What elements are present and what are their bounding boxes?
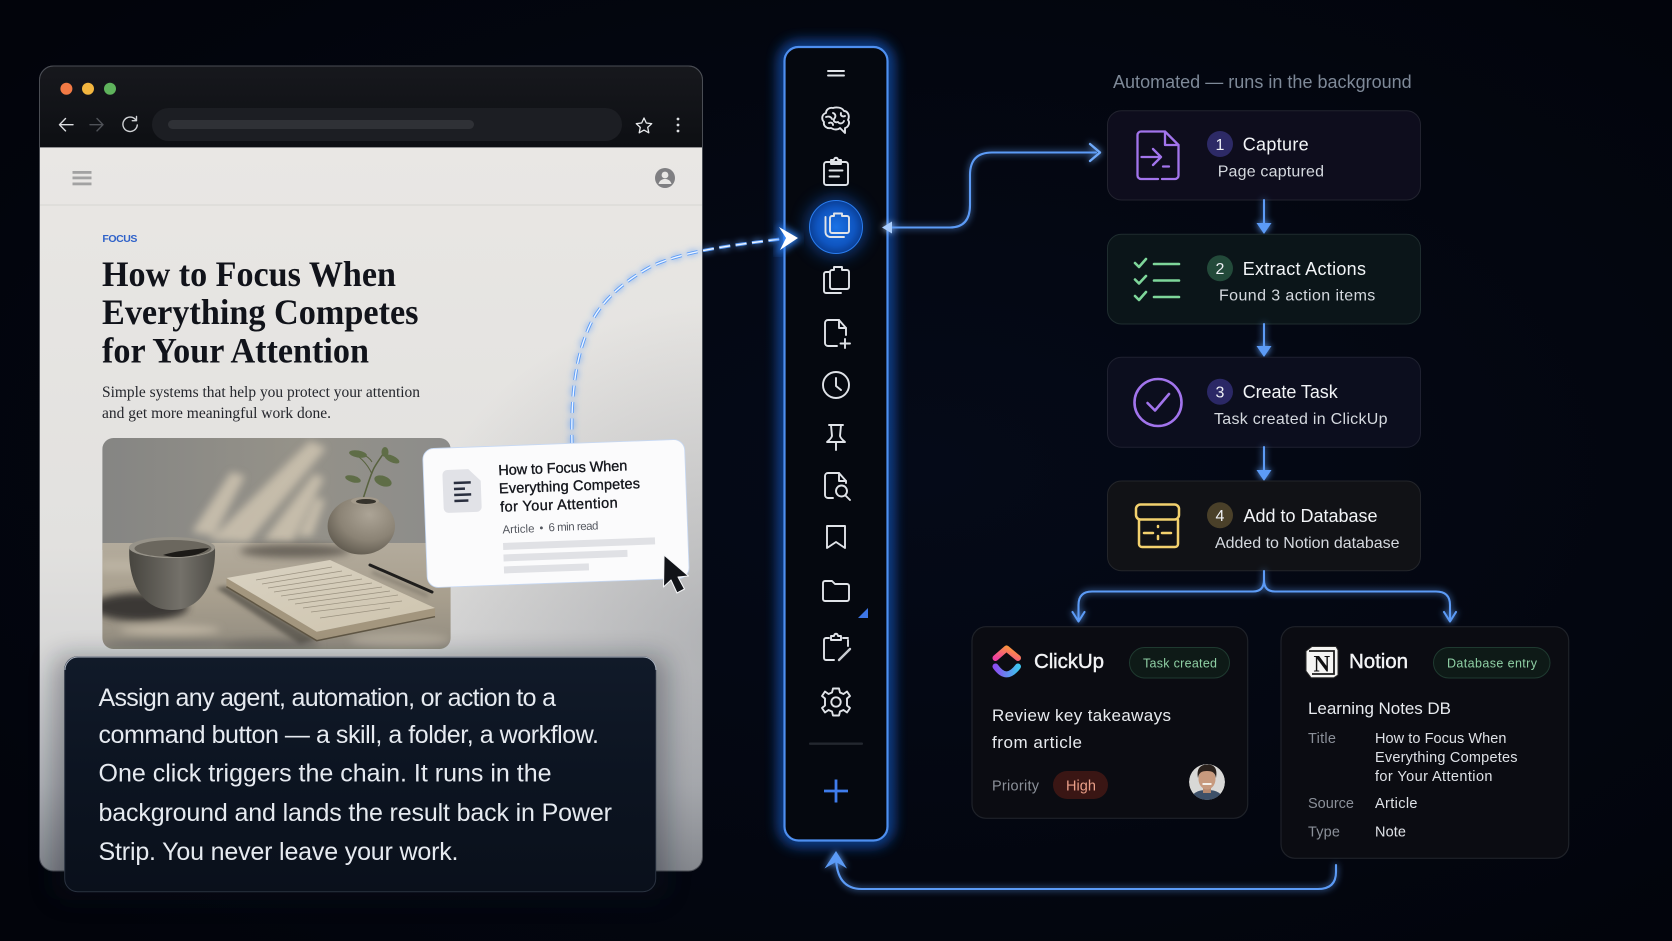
icon: file search xyxy=(825,473,850,500)
badge 1 xyxy=(1207,131,1233,157)
card: dragged article preview xyxy=(422,439,689,588)
icon: pin xyxy=(827,425,845,450)
badge: database entry xyxy=(1434,648,1550,678)
article category: FOCUS xyxy=(102,233,137,245)
arrowhead: dashed connector into active button xyxy=(779,227,798,250)
database fields: Everything Competes xyxy=(1375,750,1518,766)
browser title bar xyxy=(40,66,702,148)
text panel: description: command button — a skill, a folder, a workflow. xyxy=(98,721,599,749)
article headline: How to Focus When xyxy=(102,254,396,294)
icon: folder xyxy=(823,581,849,601)
icon: corner expand marker xyxy=(858,608,868,618)
icon: mouse cursor xyxy=(664,555,688,593)
active command button xyxy=(806,197,866,257)
task title: Review key takeaways xyxy=(992,706,1171,725)
arrow: step 2 to 3 xyxy=(1256,324,1272,357)
article subtitle xyxy=(102,384,420,422)
clickup name: ClickUp xyxy=(1034,650,1104,673)
cup xyxy=(129,537,215,610)
icon: new file xyxy=(825,320,850,348)
logo: clickup xyxy=(996,648,1018,674)
step title: Create Task xyxy=(1243,382,1339,402)
step 1: capture xyxy=(1108,111,1420,200)
icon: add button xyxy=(824,780,848,802)
preview text lines xyxy=(503,537,656,573)
preview title: for Your Attention xyxy=(500,495,618,516)
step status: Task created in ClickUp xyxy=(1214,411,1388,428)
article headline: Everything Competes xyxy=(102,292,418,332)
step 4: add to database xyxy=(1108,481,1420,571)
notebook xyxy=(226,560,435,641)
logo: notion xyxy=(1306,646,1338,678)
icon: copy xyxy=(824,267,849,293)
article photo: cup, notebook and plant xyxy=(92,438,451,651)
step title: Capture xyxy=(1243,134,1309,154)
icon: check circle xyxy=(1134,379,1182,426)
article subtitle: Simple systems that help you protect your attention xyxy=(102,384,420,401)
icon: clipboard edit xyxy=(824,634,850,660)
star and menu icons xyxy=(636,118,679,133)
task title: from article xyxy=(992,733,1082,752)
navigation icons xyxy=(60,116,137,131)
connector: dashed arc from article card to active button xyxy=(572,238,790,446)
plant in vase xyxy=(328,447,401,554)
icon: clipboard xyxy=(824,158,848,185)
icon: brain xyxy=(822,107,849,133)
text panel: description: One click triggers the chain. It runs in the xyxy=(98,760,552,788)
badge 4 xyxy=(1207,502,1233,528)
preview title: Everything Competes xyxy=(499,476,640,497)
database fields: for Your Attention xyxy=(1375,769,1492,785)
badge: high priority: High xyxy=(1066,778,1096,794)
text panel: description: background and lands the result back in Power xyxy=(98,799,612,827)
icon: capture document xyxy=(1138,132,1178,179)
article headline xyxy=(102,254,418,370)
preview title xyxy=(498,458,641,516)
preview meta: Article xyxy=(502,523,535,536)
preview title: How to Focus When xyxy=(498,458,628,479)
article headline: for Your Attention xyxy=(102,330,369,370)
arrow: fork to output cards xyxy=(1072,571,1456,622)
database fields: Note xyxy=(1375,824,1406,840)
badge 3 xyxy=(1207,379,1233,405)
database fields: Title xyxy=(1308,731,1336,747)
arrow: step 1 to 2 xyxy=(1256,200,1272,234)
database fields: Source xyxy=(1308,796,1354,812)
preview meta: • xyxy=(539,522,544,535)
arrow: step 3 to 4 xyxy=(1256,447,1272,481)
article subtitle: and get more meaningful work done. xyxy=(102,405,331,422)
database name: Learning Notes DB xyxy=(1308,699,1451,718)
preview meta: 6 min read xyxy=(548,520,599,534)
badge 1: 1 xyxy=(1216,137,1225,154)
badge: database entry: Database entry xyxy=(1447,656,1538,670)
icon: database xyxy=(1136,504,1179,547)
badge: task created xyxy=(1130,648,1230,678)
light streaks on the wall xyxy=(192,441,326,542)
database fields xyxy=(1308,731,1518,840)
heading: automated: Automated — runs in the background xyxy=(1113,72,1412,92)
badge: high priority xyxy=(1053,771,1108,799)
card: notion xyxy=(1281,627,1569,858)
step status: Added to Notion database xyxy=(1215,535,1400,552)
badge: task created: Task created xyxy=(1143,656,1217,670)
icon: checklist xyxy=(1135,259,1179,300)
step 2: extract actions xyxy=(1108,234,1420,324)
text panel: description xyxy=(52,654,668,900)
step 3: create task xyxy=(1108,357,1420,447)
step title: Extract Actions xyxy=(1243,259,1366,279)
text panel: description: Strip. You never leave your work. xyxy=(98,838,458,866)
database fields: How to Focus When xyxy=(1375,731,1506,747)
database fields: Type xyxy=(1308,824,1340,840)
badge 2 xyxy=(1207,255,1233,281)
priority label: Priority xyxy=(992,778,1040,794)
icon: bookmark xyxy=(827,526,845,548)
account avatar icon xyxy=(655,168,675,188)
step title: Add to Database xyxy=(1244,506,1378,526)
logo: notion: N xyxy=(1314,652,1330,676)
window control dots xyxy=(60,83,116,95)
step status: Page captured xyxy=(1218,164,1324,180)
icon: collapse menu xyxy=(828,71,844,76)
document icon xyxy=(442,469,482,513)
avatar xyxy=(1189,764,1225,801)
task title xyxy=(992,706,1171,752)
page hamburger icon xyxy=(72,171,92,185)
address bar xyxy=(152,108,622,141)
icon: settings gear xyxy=(822,688,850,716)
database fields: Article xyxy=(1375,796,1418,812)
text panel: description: Assign any agent, automation, or action to a xyxy=(98,684,556,712)
notion name: Notion xyxy=(1349,650,1408,673)
icon: clock xyxy=(823,372,849,398)
web page content xyxy=(40,148,702,871)
card: clickup xyxy=(972,627,1248,818)
panel: power strip sidebar xyxy=(784,47,888,840)
arrow: active button to capture step xyxy=(882,144,1100,234)
table shadows and light patches xyxy=(92,544,450,651)
step status: Found 3 action items xyxy=(1219,288,1375,304)
arrow: return loop to power strip xyxy=(824,851,1336,889)
badge 4: 4 xyxy=(1216,508,1225,525)
preview meta xyxy=(502,520,599,536)
badge 3: 3 xyxy=(1216,384,1225,402)
badge 2: 2 xyxy=(1216,261,1225,278)
panel: browser window xyxy=(40,66,702,871)
